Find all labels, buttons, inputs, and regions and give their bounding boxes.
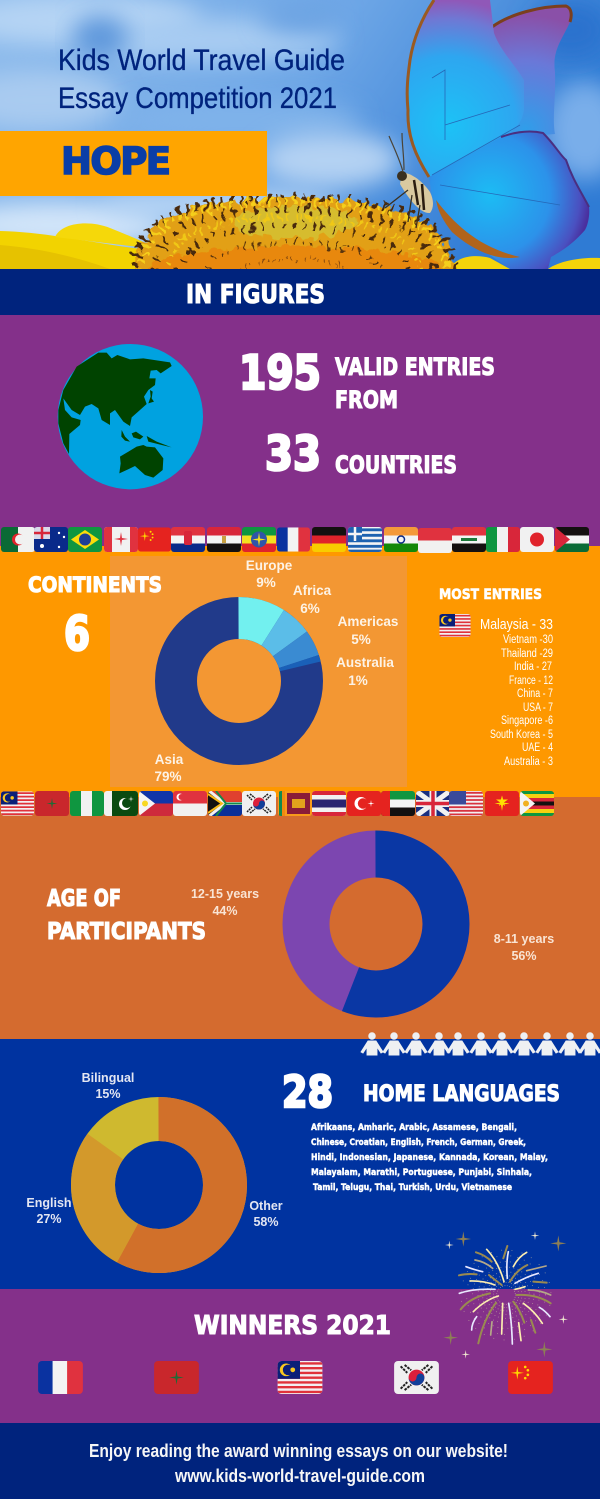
stat: 195 valid entries from: VALID ENTRIES — [335, 353, 495, 381]
heading: age of participants: AGE OF — [47, 886, 121, 912]
most entries list — [439, 587, 553, 768]
chart labels: continents: 79% — [154, 769, 182, 784]
continents count: 6 — [64, 607, 90, 662]
stat: 33 countries: 33 — [265, 427, 321, 482]
text block: language list: Chinese, Croatian, English, French, German, Greek, — [311, 1138, 526, 1148]
chart labels: continents: Australia — [336, 655, 394, 670]
most entries list: UAE - 4 — [522, 742, 553, 754]
continents count — [28, 573, 162, 662]
chart labels: age: 12-15 years — [191, 887, 259, 901]
stat: 28 home languages: 28 — [282, 1067, 333, 1118]
most entries list: India - 27 — [514, 661, 552, 673]
most entries list: Malaysia - 33 — [480, 616, 553, 633]
flag row 1 — [1, 527, 589, 553]
banner: HOPE: HOPE — [61, 140, 171, 183]
chart: continents donut — [176, 618, 302, 744]
title: Kids World Travel Guide — [58, 44, 345, 77]
text block: language list: Tamil, Telugu, Thai, Turkish, Urdu, Vietnamese — [313, 1183, 512, 1193]
icon: globe — [58, 344, 203, 489]
chart labels: languages: 15% — [95, 1087, 121, 1101]
chart labels: languages: Other — [249, 1199, 283, 1213]
winner flags — [38, 1361, 553, 1394]
chart labels: age: 56% — [511, 949, 537, 963]
most entries list: Vietnam -30 — [503, 634, 553, 646]
continents count: CONTINENTS — [28, 573, 162, 597]
chart labels: continents: Africa — [293, 583, 332, 598]
chart labels: continents: Europe — [246, 558, 293, 573]
chart labels: continents: Asia — [155, 752, 184, 767]
butterfly — [385, 0, 589, 269]
most entries list: Singapore -6 — [501, 715, 553, 727]
text block: language list: Malayalam, Marathi, Portuguese, Punjabi, Sinhala, — [311, 1168, 532, 1178]
icon: row of paper-chain people — [361, 1033, 600, 1055]
chart: home languages donut — [93, 1119, 225, 1251]
chart labels: age — [191, 887, 554, 963]
chart labels: continents — [154, 558, 398, 784]
stat: 33 countries: COUNTRIES — [335, 451, 457, 479]
sky with clouds — [0, 0, 600, 269]
heading: in figures: IN FIGURES — [186, 280, 325, 310]
chart labels: age: 8-11 years — [494, 932, 554, 946]
most entries list: South Korea - 5 — [490, 729, 553, 741]
footer text: www.kids-world-travel-guide.com — [174, 1466, 425, 1486]
sunflower petals — [0, 223, 600, 269]
stat: 33 countries — [265, 427, 457, 482]
chart: age donut — [306, 854, 446, 994]
most entries list: MOST ENTRIES — [439, 587, 542, 603]
heading: age of participants — [47, 886, 206, 945]
text block: language list — [311, 1123, 548, 1193]
banner: HOPE — [0, 131, 267, 196]
chart labels: continents: 6% — [300, 601, 320, 616]
chart labels: continents: 9% — [256, 575, 276, 590]
sunflower disk — [129, 192, 458, 269]
chart labels: continents: Americas — [338, 614, 398, 629]
panel: continents background — [110, 556, 407, 787]
footer text: Enjoy reading the award winning essays on our website! — [89, 1441, 508, 1461]
chart labels: languages: English — [26, 1196, 72, 1210]
chart labels: languages: 58% — [253, 1215, 279, 1229]
hero photo: sky, sunflower and butterfly — [0, 0, 600, 269]
footer text — [89, 1441, 508, 1486]
icon: Malaysia flag — [439, 614, 471, 637]
title: Essay Competition 2021 — [58, 82, 337, 115]
chart labels: age: 44% — [212, 904, 238, 918]
chart labels: continents: 1% — [348, 673, 368, 688]
stat: 195 valid entries from: FROM — [335, 386, 398, 414]
most entries list: France - 12 — [509, 675, 553, 687]
chart labels: languages: Bilingual — [82, 1071, 134, 1085]
stat: 28 home languages — [282, 1067, 560, 1118]
most entries list: USA - 7 — [523, 702, 553, 714]
panel: entries — [58, 344, 495, 489]
most entries list: Australia - 3 — [504, 756, 553, 768]
most entries list: China - 7 — [517, 688, 553, 700]
chart labels: languages: 27% — [36, 1212, 62, 1226]
heading: winners 2021: WINNERS 2021 — [194, 1311, 391, 1341]
title — [58, 44, 345, 115]
heading: age of participants: PARTICIPANTS — [47, 919, 206, 945]
most entries list: Thailand -29 — [501, 648, 553, 660]
text block: language list: Hindi, Indonesian, Japanese, Kannada, Korean, Malay, — [311, 1153, 548, 1163]
flag row 2 — [1, 790, 554, 817]
stat: 28 home languages: HOME LANGUAGES — [363, 1082, 560, 1107]
stat: 195 valid entries from — [239, 346, 495, 414]
icon: fireworks — [443, 1231, 568, 1359]
text block: language list: Afrikaans, Amharic, Arabic, Assamese, Bengali, — [311, 1123, 517, 1133]
chart labels: languages — [26, 1071, 283, 1229]
chart labels: continents: 5% — [351, 632, 371, 647]
stat: 195 valid entries from: 195 — [239, 346, 321, 401]
